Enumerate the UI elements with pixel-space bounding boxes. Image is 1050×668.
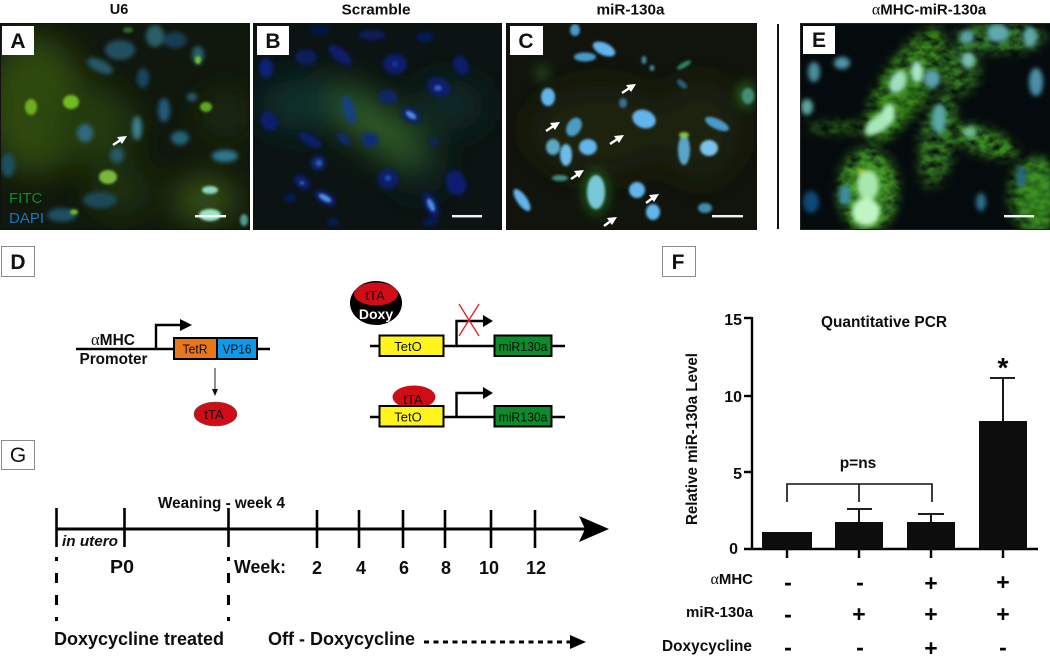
timeline axis and arrow <box>56 508 609 548</box>
panel D: repressed TetO construct with Doxy: miR130a <box>498 339 548 354</box>
panel D: repressed TetO construct with Doxy: TetO <box>394 339 422 354</box>
label: E: E <box>812 29 826 52</box>
panel D: active TetO construct with tTA: tTA <box>403 392 423 407</box>
panel D: active TetO construct with tTA: miR130a <box>498 410 548 424</box>
timeline labels: 2 <box>312 558 322 578</box>
condition table: + <box>996 601 1010 627</box>
arrows: white pointers <box>546 84 659 226</box>
timeline labels: 10 <box>479 558 499 578</box>
label: F: F <box>672 251 685 274</box>
FITC and DAPI legend <box>9 190 44 227</box>
label: A: A <box>10 30 26 53</box>
timeline labels: Week: <box>234 557 286 577</box>
FITC and DAPI legend: FITC <box>9 190 42 207</box>
bracket p=ns <box>787 455 932 502</box>
chart title: Quantitative PCR <box>821 314 947 331</box>
condition table: + <box>924 635 938 661</box>
timeline labels <box>62 495 546 578</box>
panel D: repressed TetO construct with Doxy: Doxy <box>359 306 393 322</box>
arrow: white pointer <box>113 136 127 145</box>
timeline labels: 6 <box>399 558 409 578</box>
panel titles <box>110 2 987 18</box>
condition table <box>662 569 1010 661</box>
condition table: - <box>784 634 792 660</box>
off doxycycline label and dashed arrow <box>268 629 586 649</box>
condition table: + <box>924 601 938 627</box>
timeline labels: 4 <box>356 558 366 578</box>
condition table: - <box>856 634 864 660</box>
label: G <box>2 440 34 470</box>
panel D: active TetO construct with tTA <box>370 386 565 426</box>
axis numbers <box>724 312 742 558</box>
scale bar <box>452 215 482 217</box>
y axis label: Relative miR-130a Level <box>684 353 701 525</box>
timeline labels: Weaning - week 4 <box>158 495 285 512</box>
axis numbers: 10 <box>724 389 742 406</box>
condition table: + <box>852 601 866 627</box>
label: D <box>2 246 34 276</box>
scale bar <box>195 215 226 217</box>
condition table: miR-130a <box>686 604 754 621</box>
panel C: miR-130a micrograph <box>506 23 757 230</box>
label: B <box>257 26 289 55</box>
panel D: alpha-MHC promoter construct: tTA <box>204 407 224 422</box>
panel F: quantitative PCR bar chart <box>662 312 1038 661</box>
panel titles: miR-130a <box>596 2 665 18</box>
timeline labels: 12 <box>526 558 546 578</box>
condition table: - <box>784 601 792 627</box>
panel D: alpha-MHC promoter construct: VP16 <box>222 342 252 356</box>
error bars <box>847 378 1015 522</box>
condition table: - <box>856 569 864 595</box>
icon: red cross <box>459 304 479 336</box>
axis numbers: 15 <box>724 312 742 329</box>
panel G: timeline <box>54 495 609 649</box>
bars <box>762 421 1027 549</box>
timeline labels: P0 <box>110 557 134 577</box>
doxycycline treated label: Doxycycline treated <box>54 629 224 649</box>
panel D: active TetO construct with tTA: TetO <box>394 410 422 424</box>
timeline labels: in utero <box>62 533 118 550</box>
panel titles: Scramble <box>342 2 410 18</box>
label: B: B <box>265 30 281 53</box>
panel E: alpha-MHC-miR-130a micrograph <box>777 16 1050 233</box>
panel D: alpha-MHC promoter construct <box>76 319 270 426</box>
label: F <box>662 246 696 276</box>
panel D: repressed TetO construct with Doxy <box>350 281 565 356</box>
bracket p=ns: p=ns <box>840 455 876 472</box>
timeline labels: 8 <box>441 558 451 578</box>
panel titles: U6 <box>110 2 128 18</box>
axes <box>744 317 1038 558</box>
condition table: Doxycycline <box>662 638 752 655</box>
condition table: αMHC <box>710 571 753 588</box>
condition table: + <box>924 570 938 596</box>
off doxycycline label and dashed arrow: Off - Doxycycline <box>268 629 415 649</box>
panel D: repressed TetO construct with Doxy: tTA <box>365 288 385 303</box>
label: C <box>510 26 543 55</box>
label: G: G <box>10 444 26 467</box>
axis numbers: 5 <box>733 466 742 483</box>
panel D: alpha-MHC promoter construct: TetR <box>182 342 208 356</box>
scale bar <box>712 215 743 217</box>
FITC and DAPI legend: DAPI <box>9 210 44 227</box>
panel D: alpha-MHC promoter construct: αMHC <box>91 330 135 349</box>
panel A: U6 micrograph <box>0 23 250 230</box>
panel D: alpha-MHC promoter construct: Promoter <box>80 351 148 368</box>
panel titles: αMHC-miR-130a <box>872 2 987 18</box>
label: E <box>803 26 835 54</box>
label: C: C <box>518 30 534 53</box>
significance marker: * <box>998 352 1009 383</box>
panel B: Scramble micrograph <box>253 23 502 230</box>
dashed treatment boundaries <box>56 557 228 621</box>
condition table: + <box>996 569 1010 595</box>
label: A <box>2 26 34 55</box>
label: D: D <box>10 251 26 274</box>
scale bar <box>1004 215 1034 217</box>
condition table: - <box>784 569 792 595</box>
axis numbers: 0 <box>729 541 738 558</box>
condition table: - <box>999 634 1007 660</box>
